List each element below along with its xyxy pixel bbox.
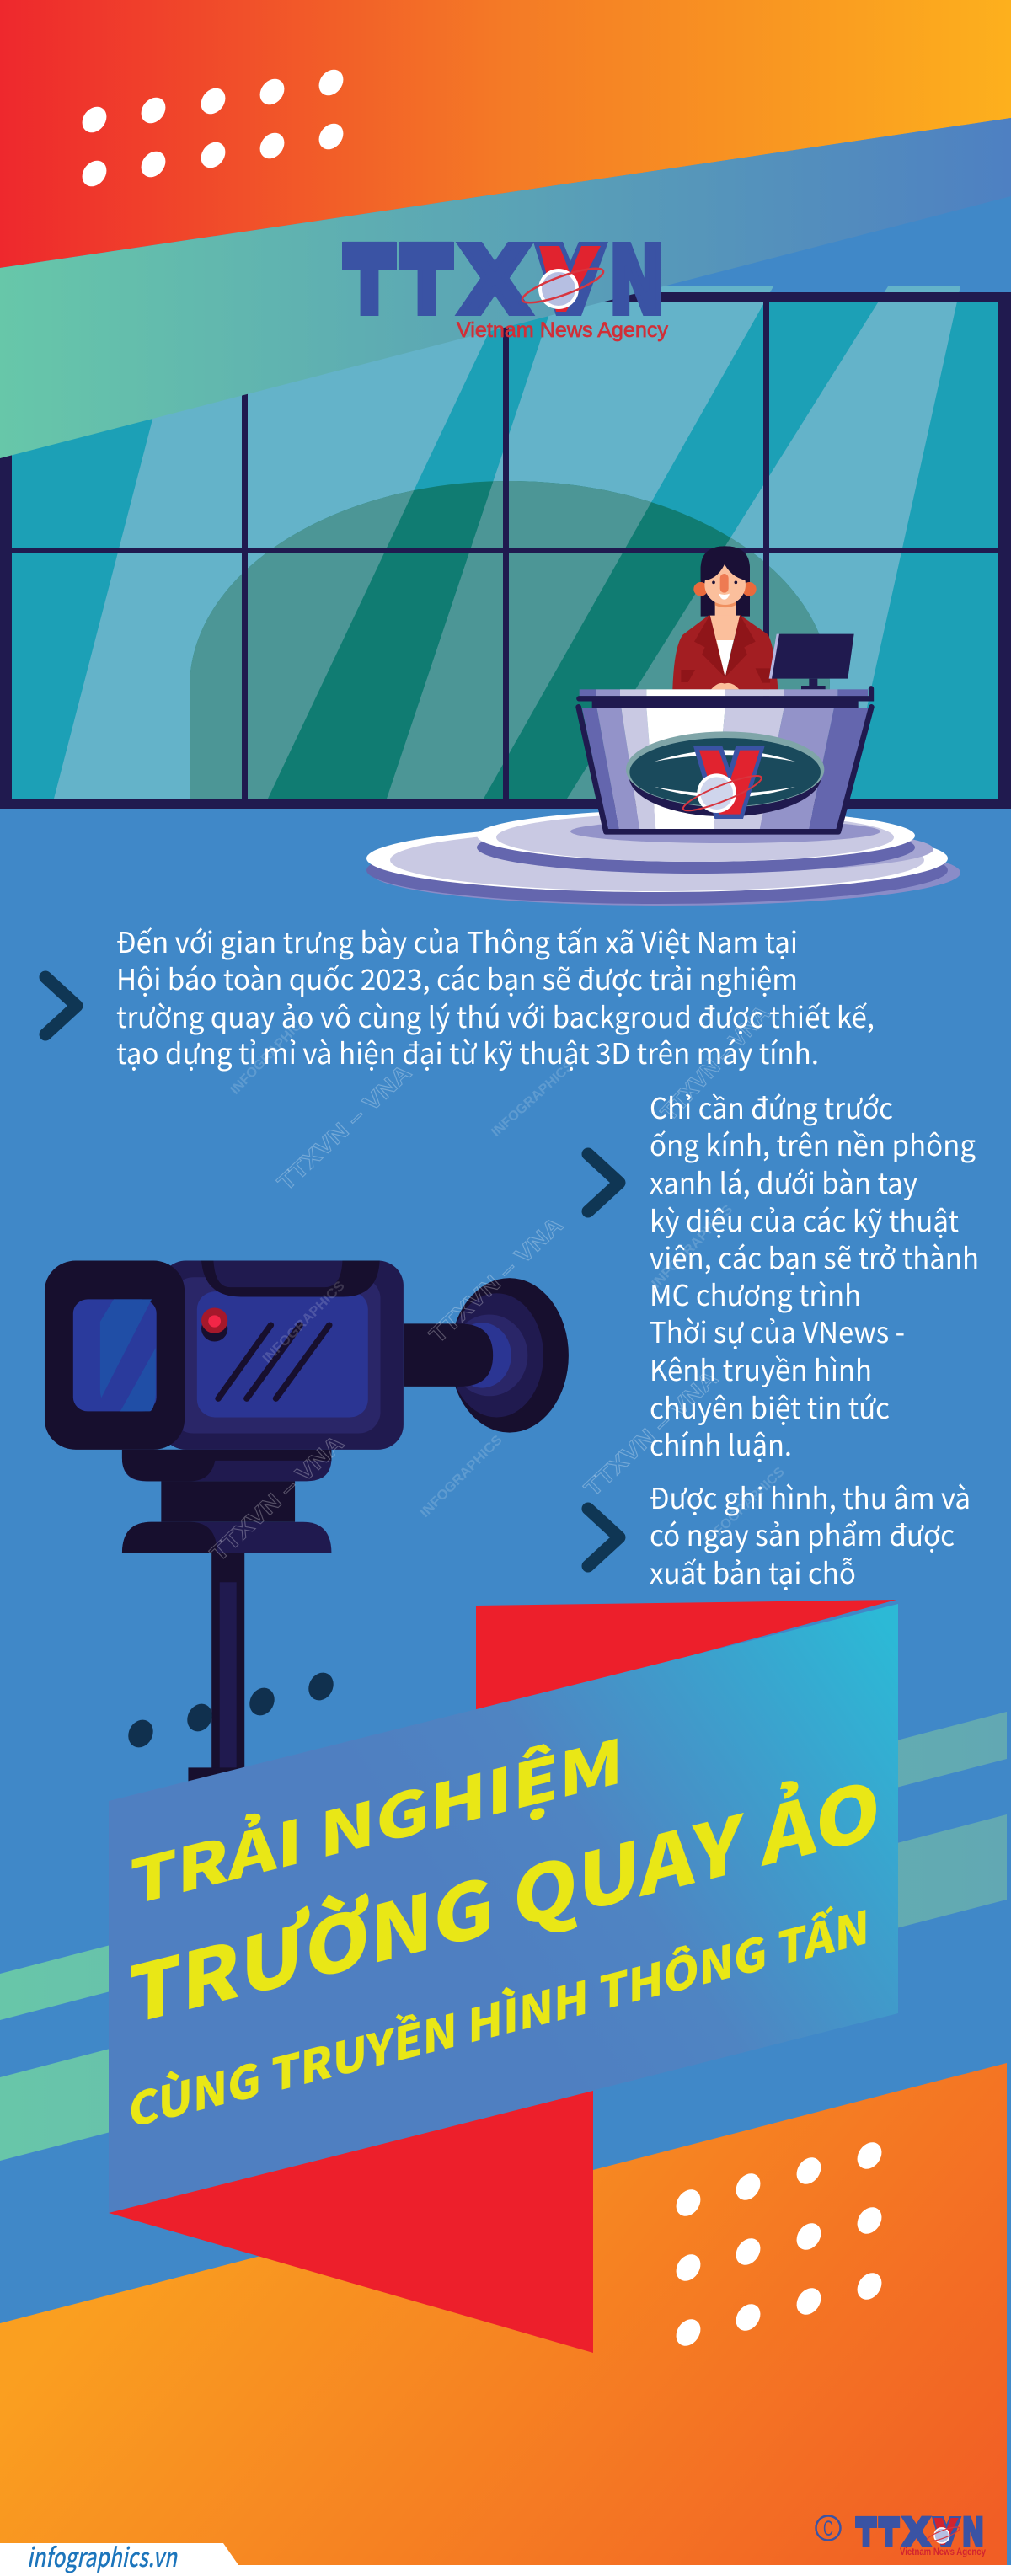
arrow 1 bbox=[45, 977, 77, 1034]
title: TRƯỜNG QUAY ẢO bbox=[129, 1747, 880, 2047]
top white dots bbox=[78, 65, 348, 191]
arrow 3 bbox=[588, 1509, 619, 1566]
text block 2: Kênh truyền hình bbox=[650, 1348, 872, 1389]
text block 2: kỳ diệu của các kỹ thuật bbox=[650, 1199, 959, 1240]
text block 2: chính luận. bbox=[650, 1423, 792, 1464]
green stripes bbox=[0, 1712, 1007, 2161]
bottom white dots bbox=[671, 2138, 886, 2350]
watermarks: INFOGRAPHICS bbox=[418, 1433, 506, 1520]
watermarks: TTXVN – VNA bbox=[655, 1001, 775, 1125]
text block 1: Đến với gian trưng bày của Thông tấn xã Việt Nam tại bbox=[116, 920, 798, 961]
anchor bbox=[672, 546, 778, 689]
logo: TTXVN Vietnam News Agency: N bbox=[609, 227, 665, 334]
logo: TTXVN Vietnam News Agency: T bbox=[345, 227, 393, 334]
text block 3: xuất bản tại chỗ bbox=[650, 1551, 856, 1592]
watermarks: TTXVN – VNA bbox=[206, 1430, 349, 1566]
text block 3: Được ghi hình, thu âm và bbox=[650, 1476, 971, 1517]
footer logo with copyright: N bbox=[962, 2510, 984, 2555]
text block 3: có ngay sản phẩm được bbox=[650, 1513, 955, 1554]
watermarks: INFOGRAPHICS bbox=[702, 1465, 788, 1548]
text block 2: ống kính, trên nền phông bbox=[650, 1123, 976, 1164]
banner: red top fold bbox=[476, 1600, 896, 1714]
text block 1 bbox=[116, 920, 875, 1072]
logo: TTXVN Vietnam News Agency: Vietnam News Agency bbox=[457, 318, 669, 342]
watermarks: TTXVN – VNA bbox=[425, 1212, 568, 1348]
text block 2: xanh lá, dưới bàn tay bbox=[650, 1161, 917, 1202]
footer site name: infographics.vn bbox=[27, 2536, 178, 2574]
news anchor and desk bbox=[579, 546, 871, 831]
watermarks bbox=[206, 1001, 788, 1566]
banner ribbon bbox=[109, 1604, 898, 2213]
round studio platform bbox=[366, 810, 960, 906]
watermarks: TTXVN – VNA bbox=[580, 1365, 723, 1501]
text block 1: Hội báo toàn quốc 2023, các bạn sẽ được trải nghiệm bbox=[116, 957, 798, 998]
footer logo with copyright bbox=[816, 2510, 986, 2557]
video camera on tripod bbox=[45, 1261, 569, 1785]
footer logo with copyright: T bbox=[857, 2510, 876, 2555]
text block 2: Thời sự của VNews - bbox=[650, 1310, 905, 1351]
bottom orange block bbox=[0, 2063, 1007, 2565]
dark dots bbox=[124, 1668, 338, 1752]
text block 2: viên, các bạn sẽ trở thành bbox=[650, 1236, 979, 1277]
watermarks: TTXVN – VNA bbox=[273, 1060, 416, 1195]
monitor bbox=[769, 634, 854, 689]
text block 2: MC chương trình bbox=[650, 1273, 861, 1314]
text block 3 bbox=[650, 1476, 971, 1592]
logo: TTXVN Vietnam News Agency: T bbox=[403, 227, 451, 334]
top green band bbox=[0, 118, 1011, 458]
title: TRẢI NGHIỆM bbox=[130, 1713, 623, 1924]
footer logo with copyright: C bbox=[823, 2517, 833, 2541]
studio window bbox=[0, 286, 1011, 809]
text block 1: tạo dựng tỉ mỉ và hiện đại từ kỹ thuật 3D trên máy tính. bbox=[116, 1031, 819, 1072]
text block 2: chuyên biệt tin tức bbox=[650, 1386, 890, 1427]
title: CÙNG TRUYỀN HÌNH THÔNG TẤN bbox=[129, 1889, 869, 2141]
arrow 2 bbox=[588, 1154, 619, 1211]
footer white strip with tab bbox=[0, 2543, 1011, 2576]
watermarks: INFOGRAPHICS bbox=[260, 1279, 348, 1366]
text block 1: trường quay ảo vô cùng lý thú với backgroud được thiết kế, bbox=[116, 995, 875, 1036]
text block 2 bbox=[650, 1086, 979, 1464]
watermarks: INFOGRAPHICS bbox=[489, 1058, 577, 1140]
text block 2: Chỉ cần đứng trước bbox=[650, 1086, 893, 1127]
banner: red bottom fold bbox=[109, 2091, 593, 2353]
logo: TTXVN Vietnam News Agency bbox=[342, 227, 669, 342]
footer logo with copyright: Vietnam News Agency bbox=[900, 2546, 986, 2557]
watermarks: INFOGRAPHICS bbox=[650, 1202, 736, 1291]
top orange band bbox=[0, 0, 1011, 268]
desk bbox=[579, 688, 871, 831]
footer logo with copyright: T bbox=[880, 2510, 899, 2555]
watermarks: INFOGRAPHICS bbox=[228, 1012, 312, 1098]
title bbox=[129, 1713, 880, 2141]
footer logo with copyright: X bbox=[902, 2510, 931, 2555]
logo: TTXVN Vietnam News Agency: X bbox=[459, 227, 531, 334]
